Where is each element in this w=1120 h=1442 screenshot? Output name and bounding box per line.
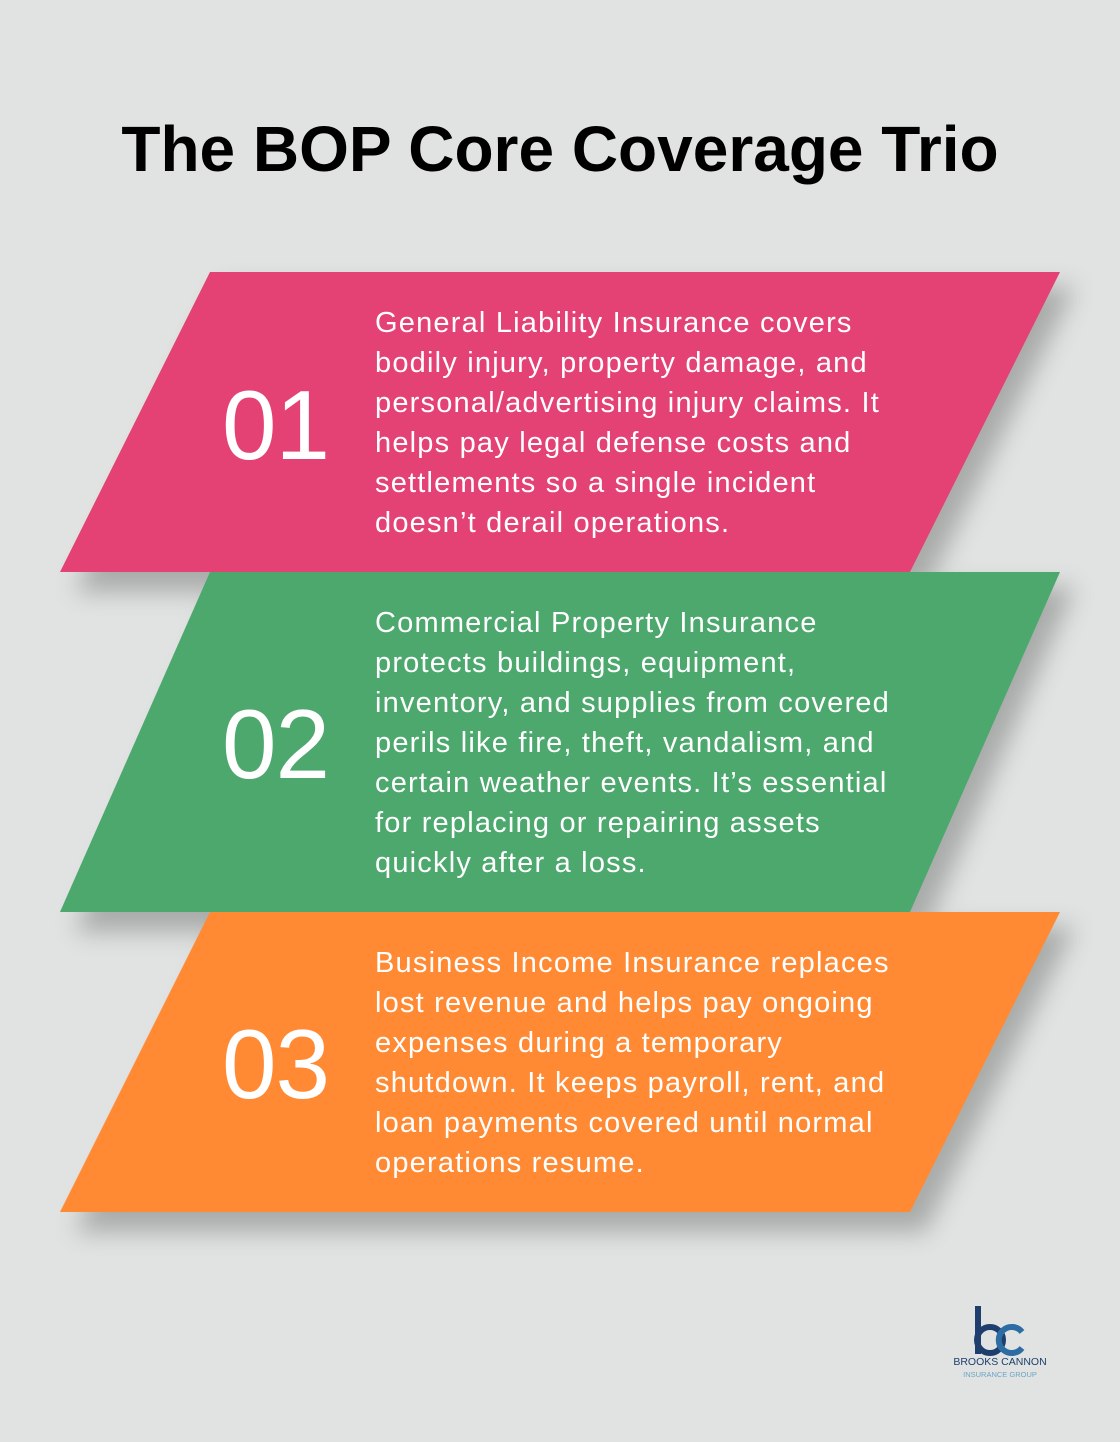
text 01 xyxy=(375,307,880,539)
logo mark xyxy=(974,1306,1024,1356)
logo text: INSURANCE GROUP xyxy=(963,1370,1037,1379)
panel: 03 xyxy=(60,912,1060,1212)
text 01: settlements so a single incident xyxy=(375,467,816,499)
shadow xyxy=(75,287,1075,1232)
text 02: certain weather events. It’s essential xyxy=(375,767,888,799)
text 02 xyxy=(375,607,890,879)
text 02: Commercial Property Insurance xyxy=(375,607,818,639)
text 01: helps pay legal defense costs and xyxy=(375,427,852,459)
logo text: BROOKS CANNON xyxy=(953,1356,1047,1368)
text 03: operations resume. xyxy=(375,1147,645,1179)
text 03: lost revenue and helps pay ongoing xyxy=(375,987,874,1019)
text 03: loan payments covered until normal xyxy=(375,1107,874,1139)
text 01: personal/advertising injury claims. It xyxy=(375,387,880,419)
logo text xyxy=(953,1356,1047,1379)
panel: 01 xyxy=(60,272,1060,572)
text 03: expenses during a temporary xyxy=(375,1027,783,1059)
logo xyxy=(953,1306,1047,1379)
number 01: 01 xyxy=(222,370,329,480)
number 02: 02 xyxy=(222,689,329,799)
text 01: bodily injury, property damage, and xyxy=(375,347,868,379)
title: The BOP Core Coverage Trio xyxy=(121,113,999,185)
text 03: shutdown. It keeps payroll, rent, and xyxy=(375,1067,885,1099)
text 02: perils like fire, theft, vandalism, and xyxy=(375,727,875,759)
text 03 xyxy=(375,947,890,1179)
text 01: General Liability Insurance covers xyxy=(375,307,853,339)
text 02: inventory, and supplies from covered xyxy=(375,687,890,719)
text 01: doesn’t derail operations. xyxy=(375,507,730,539)
text 02: protects buildings, equipment, xyxy=(375,647,796,679)
text 02: for replacing or repairing assets xyxy=(375,807,821,839)
text 02: quickly after a loss. xyxy=(375,847,647,879)
text 03: Business Income Insurance replaces xyxy=(375,947,890,979)
number 03: 03 xyxy=(222,1009,329,1119)
panel: 02 xyxy=(60,572,1060,912)
